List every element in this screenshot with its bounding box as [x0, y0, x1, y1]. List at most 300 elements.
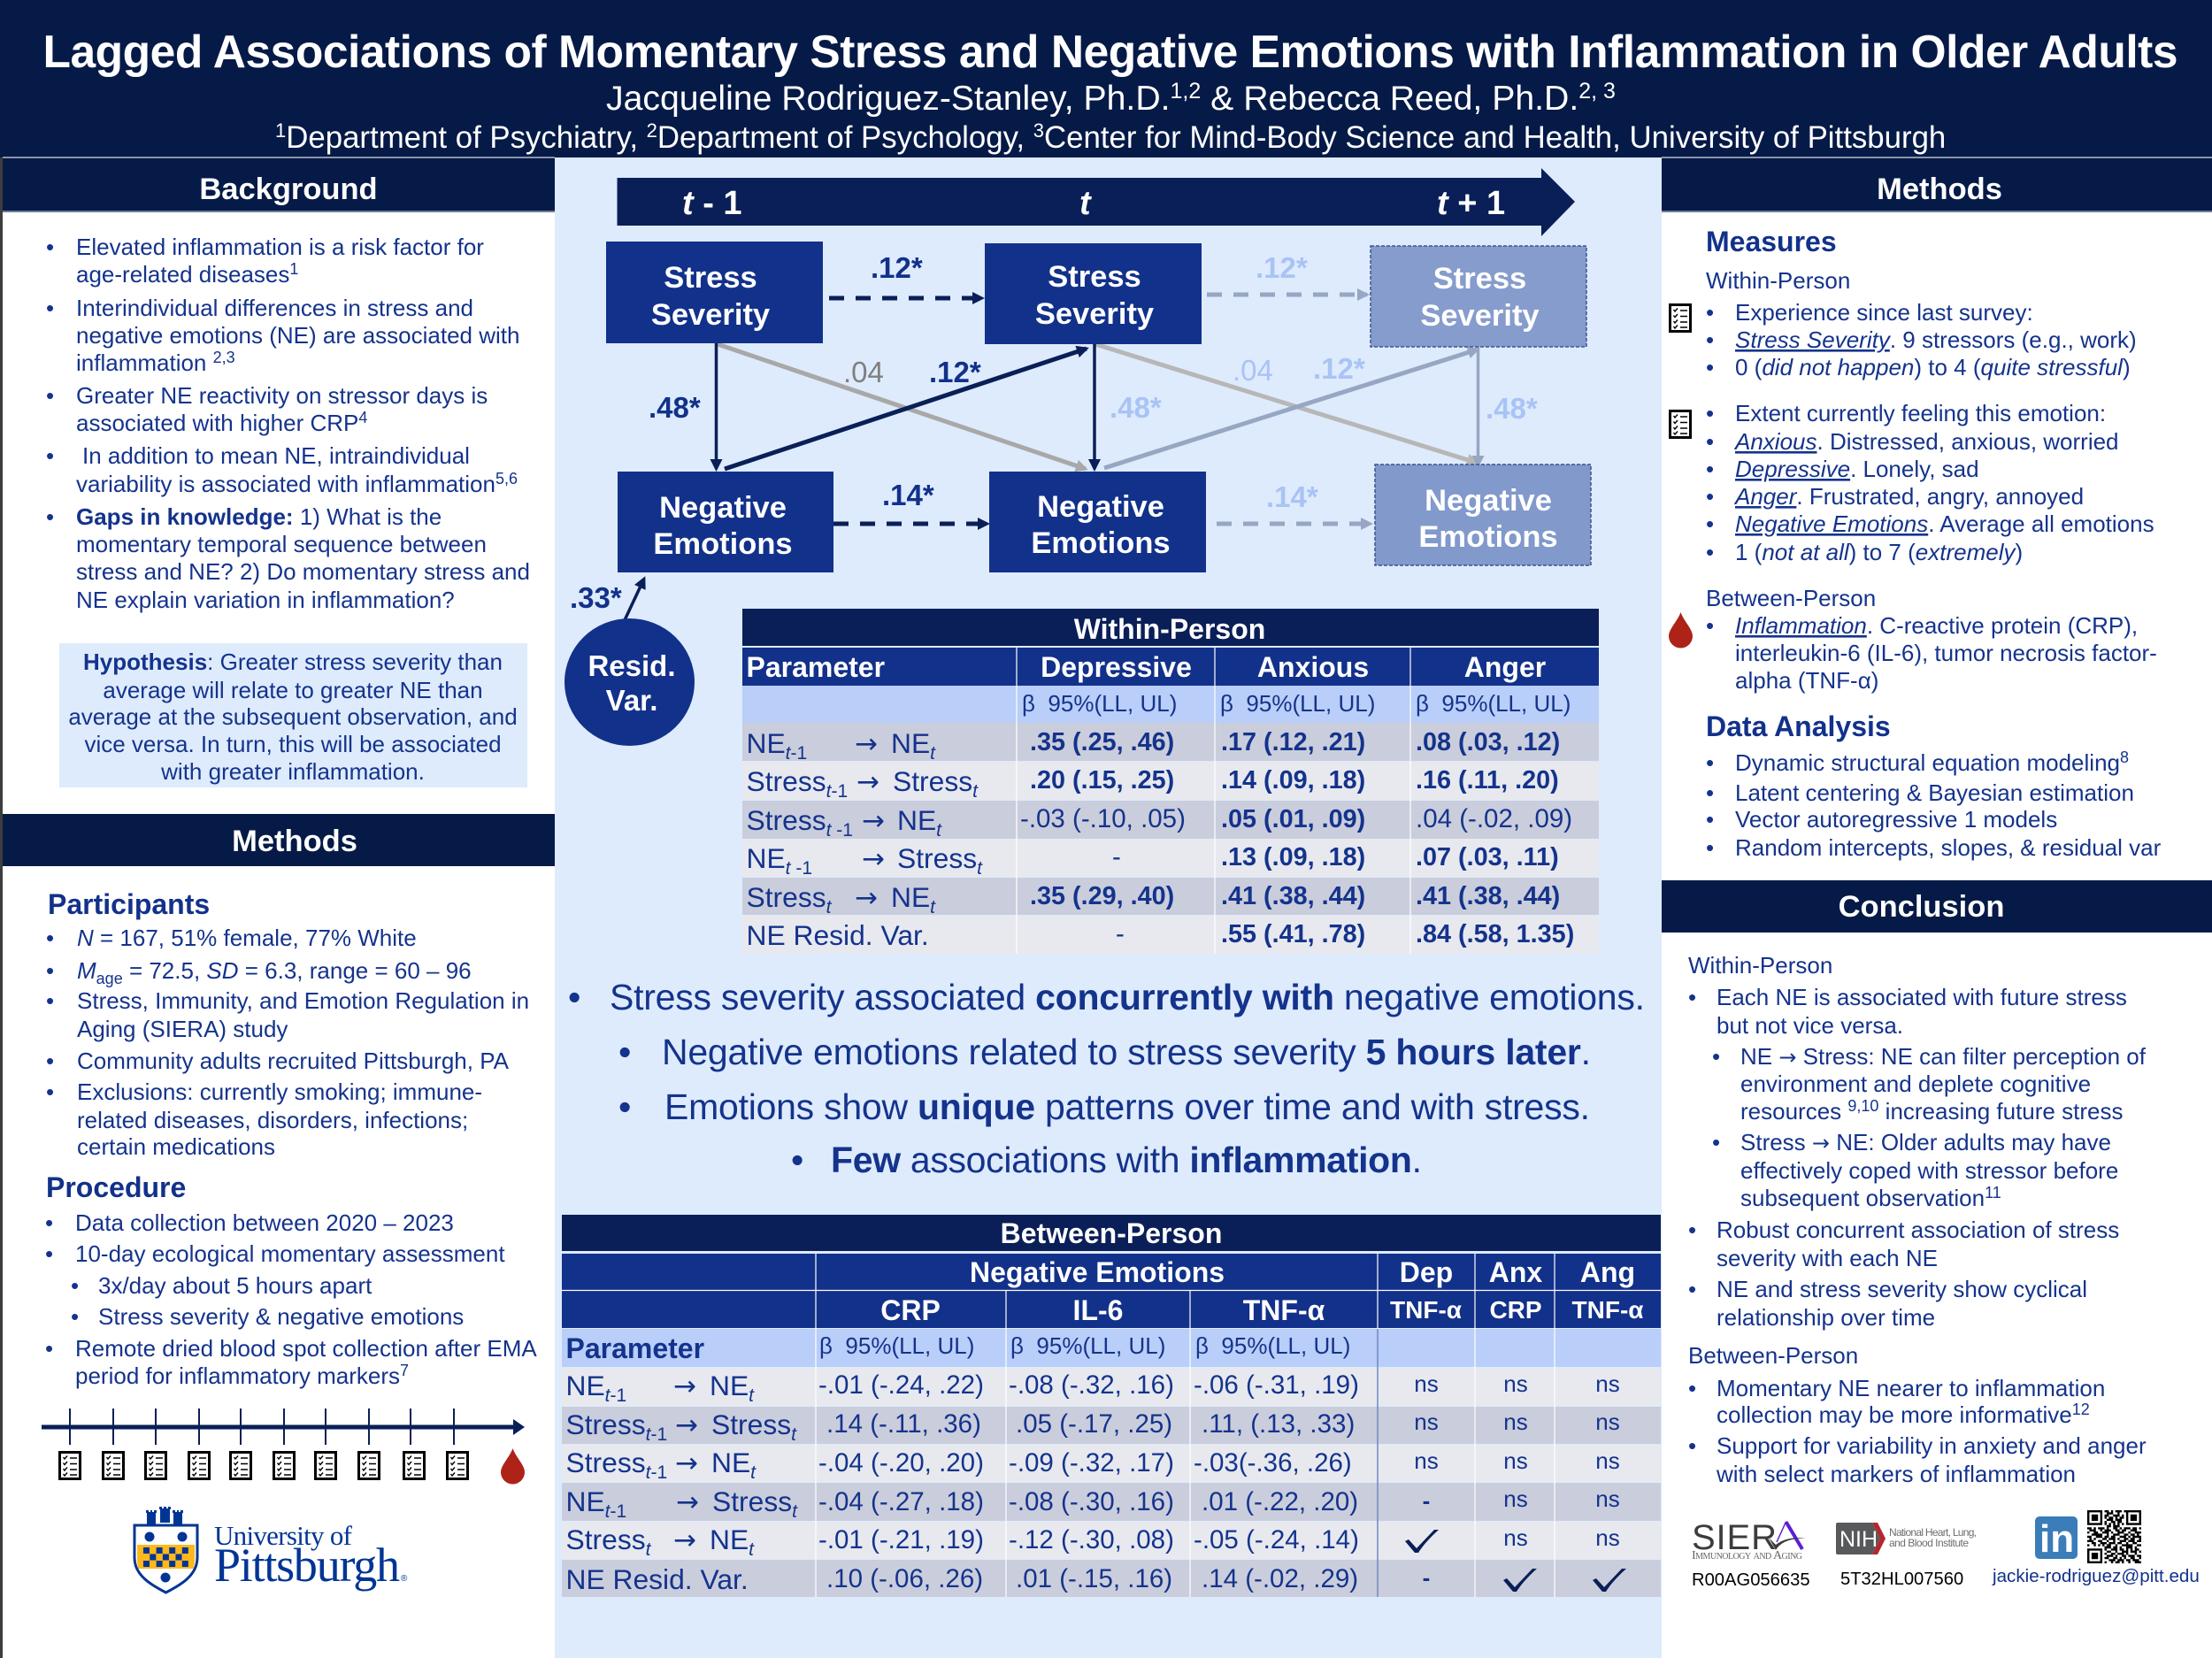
within-person rows: .07 (.03, .11)	[1416, 843, 1559, 871]
between-person rows: t	[749, 1539, 755, 1560]
grant number: 5T32HL007560	[1840, 1570, 1963, 1589]
between-person rows	[566, 1370, 1359, 1595]
between-person rows: -.03(-.36, .26)	[1194, 1448, 1352, 1478]
significance column: ns	[1595, 1447, 1620, 1474]
within-person conclusions: •	[1688, 984, 1696, 1010]
between-person rows: t	[646, 1462, 652, 1483]
box: negative emotions t-1: Emotions	[653, 527, 793, 561]
participants bullets: SD = 6.3, range = 60 – 96	[206, 957, 472, 984]
data analysis bullets: Dynamic structural equation modeling	[1735, 749, 2120, 776]
emotion measure bullets: •	[1706, 539, 1714, 565]
heading: methods	[3, 814, 555, 866]
path coefficients	[570, 251, 1538, 614]
significance column: ns	[1595, 1370, 1620, 1397]
between-person rows: -.04 (-.20, .20)	[818, 1448, 984, 1478]
between-person rows: -.01 (-.24, .22)	[818, 1370, 984, 1400]
within-person rows: →	[855, 728, 878, 760]
circle: residual variance: Resid.	[588, 649, 676, 682]
background bullets: •	[46, 442, 54, 469]
between-person headers: IL-6	[1073, 1294, 1123, 1326]
between-person conclusions: Support for variability in anxiety and anger	[1717, 1432, 2147, 1459]
within-person rows: .17 (.12, .21)	[1221, 728, 1365, 756]
circle: residual variance: Var.	[606, 684, 657, 717]
path coefficients: .48*	[1110, 391, 1162, 424]
background bullets: associated with higher CRP	[76, 410, 358, 436]
box: negative emotions t: Negative	[1037, 490, 1164, 524]
affiliations: Center for Mind-Body Science and Health, University of Pittsburgh	[1044, 120, 1946, 155]
data analysis bullets: •	[1706, 779, 1714, 806]
title: Lagged Associations of Momentary Stress and Negative Emotions with Inflammation in Older Adults	[42, 26, 2178, 77]
between-person rows: Stress	[566, 1524, 646, 1555]
within-person conclusions: Robust concurrent association of stress	[1717, 1217, 2119, 1243]
logo: NIH: and Blood Institute	[1889, 1537, 1969, 1549]
within-person rows: Stress	[747, 765, 826, 797]
icon: blood drop	[1669, 612, 1693, 648]
between-person rows: →	[676, 1486, 699, 1518]
within-person rows: .41 (.38, .44)	[1416, 882, 1560, 910]
box: negative emotions t+1: Emotions	[1418, 520, 1558, 554]
icon: survey emotions	[1671, 411, 1690, 437]
table: within-person: Within-Person	[1074, 613, 1265, 645]
procedure bullets	[45, 1209, 537, 1389]
heading: methods: Methods	[1877, 173, 2002, 206]
within-person estimate header: β 95%(LL, UL)	[1022, 690, 1177, 717]
between-person conclusions: Between-Person	[1688, 1342, 1858, 1369]
path coefficients: .33*	[570, 581, 622, 614]
background bullets: inflammation	[76, 349, 206, 376]
subheading: procedure: Procedure	[46, 1171, 186, 1203]
between-person headers: Negative Emotions	[970, 1256, 1225, 1288]
background bullets: •	[46, 503, 54, 530]
heading: background: Background	[199, 173, 378, 206]
participants bullets: Aging (SIERA) study	[77, 1016, 288, 1042]
box: stress severity t-1	[606, 242, 823, 343]
background bullets: 2,3	[213, 349, 235, 366]
between-person rows: -.05 (-.24, .14)	[1194, 1525, 1359, 1554]
between-person rows: →	[675, 1447, 698, 1479]
panel: background	[3, 158, 555, 787]
between-person conclusions: collection may be more informative	[1717, 1401, 2072, 1428]
within-person conclusions: Within-Person	[1688, 952, 1832, 979]
background bullets: momentary temporal sequence between	[76, 531, 487, 557]
heading: conclusion	[1662, 880, 2212, 933]
participants bullets: •	[46, 987, 54, 1014]
authors: 1,2	[1171, 79, 1201, 104]
between-person rows: NE Resid. Var.	[566, 1563, 749, 1595]
between-person rows: →	[673, 1370, 696, 1402]
significance column: ns	[1595, 1409, 1620, 1435]
between-person estimate header	[566, 1332, 1350, 1364]
inflammation bullet: Inflammation. C-reactive protein (CRP),	[1735, 612, 2138, 639]
within-person rows: -	[1116, 919, 1125, 948]
between-person headers: TNF-α	[1572, 1296, 1643, 1324]
background bullets: 1	[289, 260, 298, 278]
within-person header row	[747, 651, 1546, 683]
hypothesis box: average will relate to greater NE than	[103, 677, 483, 703]
icon: LinkedIn: in	[2039, 1517, 2074, 1561]
within-person estimate header	[1022, 690, 1571, 717]
participants bullets	[46, 925, 529, 1160]
procedure bullets: •	[45, 1240, 53, 1267]
background bullets: 5,6	[495, 470, 518, 487]
within-person rows: →	[862, 843, 885, 875]
within-person conclusions: environment and deplete cognitive	[1740, 1071, 2091, 1097]
within-person rows: -	[1112, 842, 1121, 871]
background bullets: In addition to mean NE, intraindividual	[82, 442, 470, 469]
key findings statements: Emotions show unique patterns over time and with stress.	[664, 1086, 1590, 1127]
within-person rows: NE	[897, 804, 936, 836]
background bullets: age-related diseases	[76, 261, 289, 288]
key findings statements: •	[618, 1032, 631, 1072]
within-person header row: Anger	[1464, 651, 1546, 683]
between-person rows: Stress	[712, 1485, 792, 1517]
between-person conclusions: with select markers of inflammation	[1716, 1461, 2076, 1487]
path coefficients: .04	[843, 356, 884, 388]
within-person conclusions: NE and stress severity show cyclical	[1717, 1276, 2087, 1302]
authors: & Rebecca Reed, Ph.D.	[1201, 80, 1578, 118]
within-person rows: -1	[791, 743, 807, 764]
between-person rows: Stress	[566, 1447, 646, 1478]
between-person rows: -.08 (-.30, .16)	[1009, 1487, 1174, 1516]
between-person headers	[880, 1256, 1643, 1326]
procedure bullets: Data collection between 2020 – 2023	[75, 1209, 454, 1236]
within-person conclusions: •	[1712, 1043, 1720, 1070]
within-person rows: .55 (.41, .78)	[1221, 920, 1365, 948]
within-person rows: →	[856, 766, 879, 798]
center column background	[555, 157, 1662, 1658]
logo: SIERA	[1692, 1518, 1810, 1590]
between-person rows: →	[675, 1409, 698, 1441]
background bullets: stress and NE? 2) Do momentary stress and	[76, 558, 530, 585]
within-person conclusions: subsequent observation	[1740, 1185, 1985, 1211]
significance column: ns	[1503, 1370, 1528, 1397]
within-person rows: →	[855, 882, 878, 914]
background bullets: •	[46, 382, 54, 409]
within-person conclusions: NE → Stress: NE can filter perception of	[1740, 1043, 2147, 1070]
between-person rows: →	[673, 1524, 696, 1556]
between-person rows: .05 (-.17, .25)	[1016, 1409, 1172, 1439]
background bullets: Gaps in knowledge: 1) What is the	[76, 503, 442, 530]
between-person headers: CRP	[1489, 1296, 1542, 1324]
between-person rows: -.08 (-.32, .16)	[1009, 1370, 1174, 1400]
between-person rows: .11, (.13, .33)	[1202, 1409, 1355, 1439]
within-person rows: t	[826, 897, 833, 917]
within-person rows: -1	[791, 858, 812, 879]
between-person rows: NE	[710, 1370, 749, 1401]
inflammation bullet: interleukin-6 (IL-6), tumor necrosis factor-	[1735, 640, 2157, 666]
emotion measure bullets: Extent currently feeling this emotion:	[1735, 400, 2106, 426]
within-person rows: →	[862, 805, 885, 837]
between-person headers: TNF-α	[1243, 1294, 1325, 1326]
between-person rows: -.06 (-.31, .19)	[1194, 1370, 1359, 1400]
within-person label: Within-Person	[1706, 267, 1850, 294]
within-person rows: t	[977, 858, 983, 879]
logo: SIERA: SIER	[1692, 1518, 1777, 1557]
within-person rows: .08 (.03, .12)	[1416, 728, 1560, 756]
logo: SIERA: Immunology and Aging	[1692, 1549, 1802, 1562]
header banner	[0, 0, 2212, 158]
within-person rows: -1	[831, 781, 848, 802]
time arrow	[618, 168, 1575, 236]
participants bullets: age	[96, 970, 123, 987]
path coefficients: .12*	[871, 251, 923, 284]
box: negative emotions t	[989, 472, 1206, 572]
within-person rows: .41 (.38, .44)	[1221, 882, 1365, 910]
between-person rows: -1	[611, 1501, 626, 1522]
logo: University of Pittsburgh: Pittsburgh	[214, 1539, 400, 1592]
box: stress severity t: Severity	[1035, 297, 1154, 331]
grant number: R00AG056635	[1692, 1570, 1810, 1590]
within-person conclusions: 11	[1985, 1184, 2001, 1201]
panel: path diagram	[565, 168, 1591, 746]
table: between-person	[562, 1215, 1661, 1597]
procedure bullets: 7	[400, 1362, 409, 1379]
participants bullets: •	[46, 1048, 54, 1074]
procedure bullets: Stress severity & negative emotions	[98, 1303, 464, 1330]
path coefficients: .04	[1233, 354, 1273, 387]
affiliations: 1	[275, 119, 286, 142]
background bullets: NE explain variation in inflammation?	[76, 587, 455, 613]
between-person rows: -1	[611, 1386, 626, 1406]
significance column: ns	[1503, 1447, 1528, 1474]
within-person conclusions: Each NE is associated with future stress	[1717, 984, 2127, 1010]
heading: background	[3, 158, 555, 212]
background bullets: •	[46, 295, 54, 321]
between-person rows: Stress	[566, 1409, 646, 1440]
between-person rows: -1	[650, 1424, 667, 1445]
hypothesis box	[59, 643, 527, 787]
box: negative emotions t-1: Negative	[659, 491, 787, 525]
between-person headers: Ang	[1580, 1256, 1635, 1288]
within-person rows: NE	[747, 727, 786, 759]
path coefficients: .12*	[1313, 352, 1365, 385]
between-person estimate header: β 95%(LL, UL)	[1010, 1332, 1165, 1359]
within-person rows: -1	[831, 820, 853, 841]
box: negative emotions t+1	[1375, 464, 1591, 565]
path coefficients: .14*	[882, 479, 934, 511]
participants bullets: •	[46, 1078, 54, 1105]
key findings statements: Stress severity associated concurrently with negative emotions.	[610, 977, 1645, 1017]
heading: conclusion: Conclusion	[1839, 890, 2004, 924]
within-person rows: NE Resid. Var.	[747, 919, 929, 951]
QR code	[2087, 1511, 2141, 1562]
within-person rows: .20 (.15, .25)	[1030, 766, 1174, 794]
path coefficients: .14*	[1266, 480, 1318, 513]
within-person rows: .05 (.01, .09)	[1221, 805, 1365, 833]
subheading: data analysis: Data Analysis	[1706, 710, 1891, 742]
affiliations: Department of Psychology,	[657, 120, 1033, 155]
between-person rows: NE	[566, 1485, 605, 1517]
contact email: jackie-rodriguez@pitt.edu	[1992, 1566, 2200, 1586]
emotion measure bullets: Depressive. Lonely, sad	[1735, 456, 1979, 482]
within-person rows: t	[972, 781, 979, 802]
time arrow: t - 1	[682, 185, 742, 222]
circle: residual variance	[565, 618, 695, 746]
path coefficients: .12*	[929, 356, 981, 388]
emotion measure bullets: Negative Emotions. Average all emotions	[1735, 510, 2154, 537]
significance column: ns	[1414, 1447, 1439, 1474]
path coefficients: .48*	[1486, 392, 1538, 425]
between-person headers: CRP	[880, 1294, 941, 1326]
table: within-person	[742, 609, 1599, 954]
within-person estimate header: β 95%(LL, UL)	[1220, 690, 1375, 717]
background bullets: Greater NE reactivity on stressor days is	[76, 382, 488, 409]
emotion measure bullets: Anxious. Distressed, anxious, worried	[1733, 428, 2119, 455]
inflammation bullet: •	[1706, 612, 1714, 639]
between-person conclusions: •	[1688, 1432, 1696, 1459]
within-person rows: t	[786, 743, 792, 764]
inflammation bullet	[1706, 612, 2157, 694]
within-person rows: .04 (-.02, .09)	[1416, 804, 1572, 833]
between-person rows: t	[605, 1386, 611, 1406]
within-person rows: Stress	[893, 765, 972, 797]
key findings statements: •	[618, 1086, 631, 1127]
data analysis bullets: •	[1706, 834, 1714, 861]
stress measure bullets	[1706, 299, 2137, 380]
within-person rows: t	[826, 820, 833, 841]
subheading: measures: Measures	[1706, 226, 1837, 257]
background bullets	[46, 234, 530, 613]
key findings statements: Few associations with inflammation.	[831, 1140, 1422, 1180]
within-person rows: .13 (.09, .18)	[1221, 843, 1365, 871]
between-person rows: t	[646, 1539, 652, 1560]
significance column: ns	[1503, 1485, 1528, 1512]
between-person rows: .01 (-.15, .16)	[1016, 1564, 1172, 1593]
procedure bullets: period for inflammatory markers	[75, 1362, 400, 1389]
within-person conclusions: severity with each NE	[1717, 1245, 1938, 1271]
background bullets: 4	[358, 409, 367, 426]
subheading: participants: Participants	[48, 888, 210, 920]
left edge strip	[0, 0, 3, 1658]
significance column: ns	[1503, 1524, 1528, 1551]
background bullets: Elevated inflammation is a risk factor for	[76, 234, 484, 260]
data analysis bullets: Latent centering & Bayesian estimation	[1735, 779, 2134, 806]
between-person headers: Dep	[1400, 1256, 1453, 1288]
data analysis bullets	[1706, 748, 2162, 861]
path coefficients: .12*	[1256, 251, 1308, 284]
between-person rows: -1	[650, 1462, 667, 1483]
hypothesis box: average at the subsequent observation, and	[68, 703, 518, 730]
background bullets: variability is associated with inflammation	[76, 471, 495, 497]
affiliations: 2	[647, 119, 657, 142]
background bullets: Interindividual differences in stress and	[76, 295, 473, 321]
background bullets: negative emotions (NE) are associated with	[76, 322, 519, 349]
within-person conclusions: •	[1688, 1276, 1696, 1302]
within-person rows: .35 (.29, .40)	[1030, 882, 1174, 910]
significance column: ns	[1414, 1370, 1439, 1397]
time arrow: t	[1079, 185, 1092, 222]
panel: methods right	[1662, 158, 2212, 861]
participants bullets: Community adults recruited Pittsburgh, PA	[77, 1048, 510, 1074]
within-person header row: Parameter	[747, 651, 885, 683]
procedure bullets: 3x/day about 5 hours apart	[98, 1272, 373, 1299]
affiliations: Department of Psychiatry,	[286, 120, 647, 155]
between-person rows: .14 (-.11, .36)	[826, 1409, 981, 1439]
authors: Jacqueline Rodriguez-Stanley, Ph.D.	[606, 80, 1171, 118]
key findings statements: •	[791, 1140, 803, 1180]
participants bullets: •	[46, 925, 54, 951]
between-person estimate header: Parameter	[566, 1332, 704, 1364]
within-person rows: NE	[891, 881, 930, 913]
time arrow: t + 1	[1437, 185, 1505, 222]
box: stress severity t: Stress	[1048, 260, 1141, 294]
significance column: ns	[1414, 1409, 1439, 1435]
logo: University of Pittsburgh: University of	[214, 1520, 353, 1551]
data analysis bullets: Random intercepts, slopes, & residual var	[1735, 834, 2162, 861]
between-person estimate header: β 95%(LL, UL)	[819, 1332, 974, 1359]
between-person rows: t	[749, 1386, 755, 1406]
participants bullets: = 72.5,	[123, 957, 206, 984]
arrows: stress to negative emotions	[624, 295, 1478, 622]
between-person conclusions	[1688, 1342, 2147, 1487]
box: negative emotions t: Emotions	[1031, 526, 1171, 560]
between-person estimate header: β 95%(LL, UL)	[1195, 1332, 1350, 1359]
box: stress severity t	[985, 243, 1202, 344]
emotion measure bullets: 1 (not at all) to 7 (extremely)	[1735, 539, 2023, 565]
icons: surveys	[60, 1453, 467, 1479]
icon: survey stress	[1671, 304, 1690, 331]
procedure bullets: •	[71, 1303, 79, 1330]
stress measure bullets: Experience since last survey:	[1735, 299, 2033, 326]
box: stress severity t+1: Severity	[1420, 299, 1540, 333]
panel: methods left	[3, 814, 555, 1593]
participants bullets: •	[46, 957, 54, 984]
participants bullets: N = 167, 51% female, 77% White	[77, 925, 417, 951]
between-person headers: Anx	[1489, 1256, 1542, 1288]
between-person headers: TNF-α	[1390, 1296, 1462, 1324]
key findings statements: Negative emotions related to stress severity 5 hours later.	[662, 1032, 1591, 1072]
within-person rows: t	[936, 820, 942, 841]
within-person rows: t	[786, 858, 792, 879]
procedure bullets: 10-day ecological momentary assessment	[75, 1240, 505, 1267]
box: stress severity t-1: Stress	[664, 261, 757, 295]
emotion measure bullets: •	[1706, 510, 1714, 537]
within-person conclusions: relationship over time	[1717, 1304, 1935, 1331]
authors: 2, 3	[1578, 79, 1616, 104]
logo: NIH: National Heart, Lung,	[1889, 1526, 1977, 1539]
within-person rows: -.03 (-.10, .05)	[1020, 804, 1186, 833]
stress measure bullets: Stress Severity. 9 stressors (e.g., work)	[1735, 326, 2137, 353]
within-person rows: Stress	[747, 881, 826, 913]
box: stress severity t+1: Stress	[1433, 262, 1526, 296]
between-person conclusions: 12	[2072, 1401, 2090, 1418]
hypothesis box: with greater inflammation.	[160, 758, 425, 785]
emotion measure bullets: Anger. Frustrated, angry, annoyed	[1733, 483, 2084, 510]
box: stress severity t-1: Severity	[651, 298, 770, 332]
between-person label: Between-Person	[1706, 585, 1876, 611]
within-person header row: Depressive	[1041, 651, 1192, 683]
stress measure bullets: •	[1706, 326, 1714, 353]
path coefficients: .48*	[649, 391, 701, 424]
within-person rows: .84 (.58, 1.35)	[1416, 920, 1574, 948]
between-person rows: t	[792, 1501, 798, 1522]
procedure bullets: Remote dried blood spot collection after EMA	[75, 1335, 537, 1362]
within-person conclusions: Stress → NE: Older adults may have	[1740, 1129, 2111, 1155]
participants bullets: Stress, Immunity, and Emotion Regulation in	[77, 987, 529, 1014]
within-person estimate header: β 95%(LL, UL)	[1416, 690, 1571, 717]
within-person rows: NE	[891, 727, 930, 759]
within-person header row: Anxious	[1257, 651, 1369, 683]
procedure bullets: •	[71, 1272, 79, 1299]
box: negative emotions t-1	[618, 472, 833, 572]
inflammation bullet: alpha (TNF-α)	[1735, 667, 1878, 694]
emotion measure bullets: •	[1706, 483, 1714, 510]
hypothesis box: vice versa. In turn, this will be associated	[84, 731, 502, 757]
within-person rows	[747, 727, 1574, 951]
within-person conclusions: •	[1688, 1217, 1696, 1243]
between-person rows: NE	[710, 1524, 749, 1555]
hypothesis box: Hypothesis: Greater stress severity than	[83, 649, 503, 675]
